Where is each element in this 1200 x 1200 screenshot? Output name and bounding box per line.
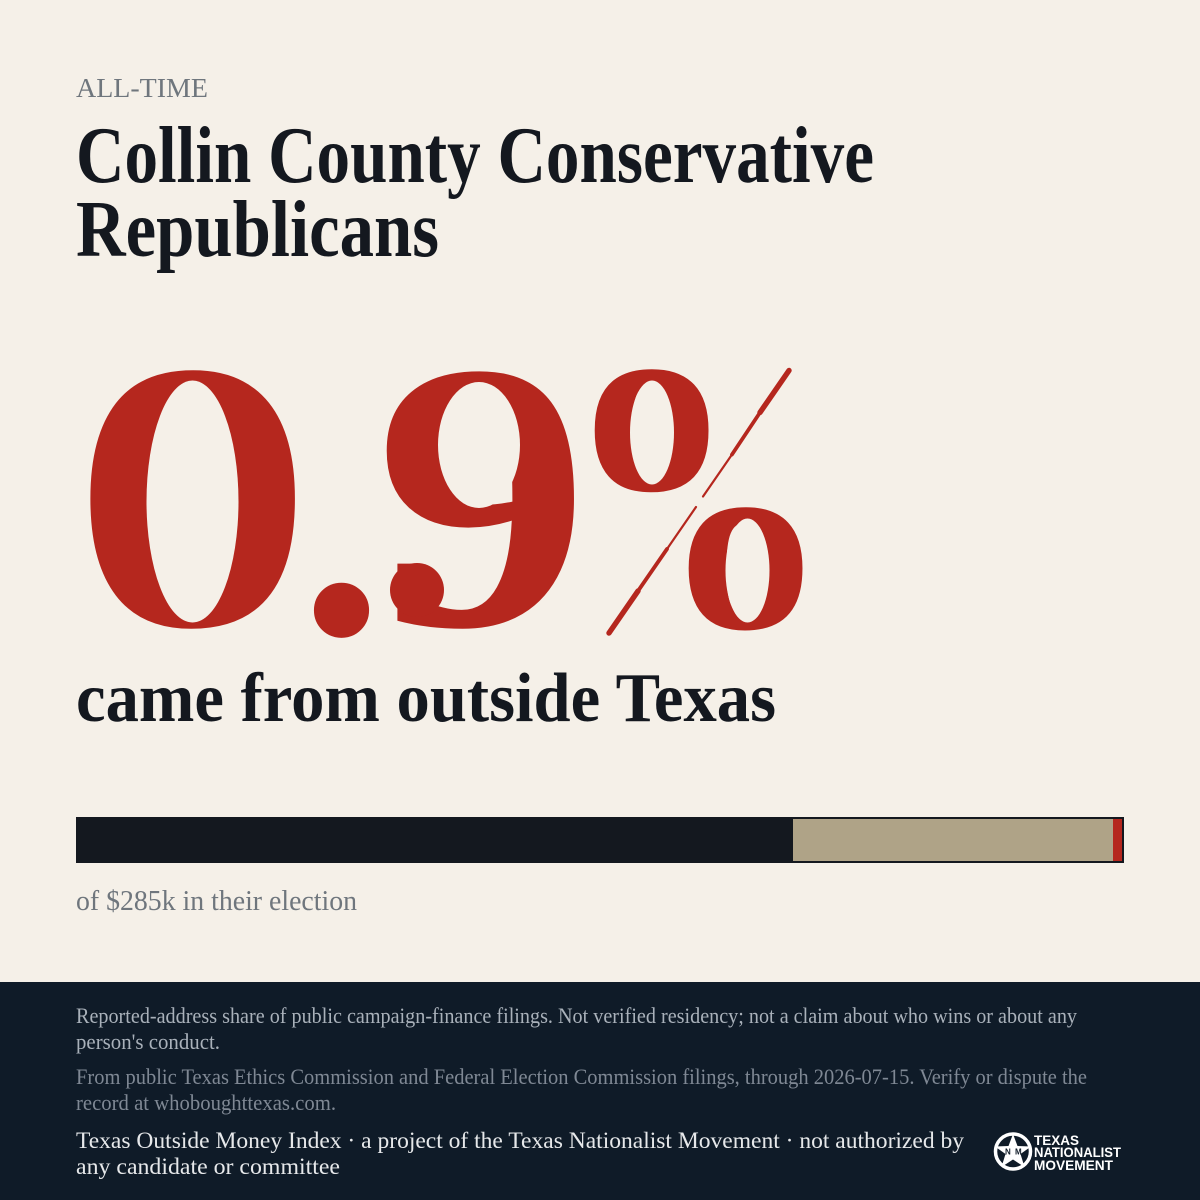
attribution: any candidate or committee [76, 1154, 340, 1179]
big statistic: 0.9%: . [299, 330, 384, 707]
title: Republicans [76, 186, 439, 274]
disclaimer: Reported-address share of public campaign-finance filings. Not verified residency; not a claim about who wins or about any [76, 1003, 1077, 1028]
stacked bar [76, 817, 1124, 863]
footer panel [0, 982, 1200, 1200]
big statistic: 0.9%: % [478, 322, 836, 700]
bar caption: of $285k in their election [76, 885, 357, 917]
icon: star in circle [995, 1134, 1031, 1169]
logo: Texas Nationalist Movement [995, 1133, 1122, 1173]
eyebrow: all-time: ALL-TIME [76, 73, 208, 103]
big statistic: 0.9%: 0 [72, 285, 313, 709]
title [76, 112, 874, 274]
attribution [76, 1128, 964, 1179]
logo wordmark: NATIONALIST [1034, 1145, 1122, 1160]
logo wordmark: MOVEMENT [1034, 1158, 1114, 1173]
icon: star in circle: N [1005, 1148, 1011, 1156]
attribution: Texas Outside Money Index · a project of the Texas Nationalist Movement · not authorized by [76, 1128, 964, 1153]
big statistic: 0.9%: 9 [375, 284, 589, 708]
source note: From public Texas Ethics Commission and Federal Election Commission filings, through 2026-07-15. Verify or dispute the [76, 1064, 1087, 1089]
logo wordmark [1034, 1133, 1122, 1173]
big statistic: 0.9% [90, 368, 802, 638]
icon: star in circle: M [1015, 1148, 1022, 1156]
source note: record at whoboughttexas.com. [76, 1090, 336, 1115]
disclaimer [76, 1003, 1077, 1054]
big statistic: 0.9%: % [558, 292, 916, 670]
title: Collin County Conservative [76, 112, 874, 200]
logo wordmark: TEXAS [1034, 1133, 1079, 1148]
source note [76, 1064, 1087, 1115]
disclaimer: person's conduct. [76, 1029, 220, 1054]
subheading: came from outside Texas [76, 660, 776, 737]
